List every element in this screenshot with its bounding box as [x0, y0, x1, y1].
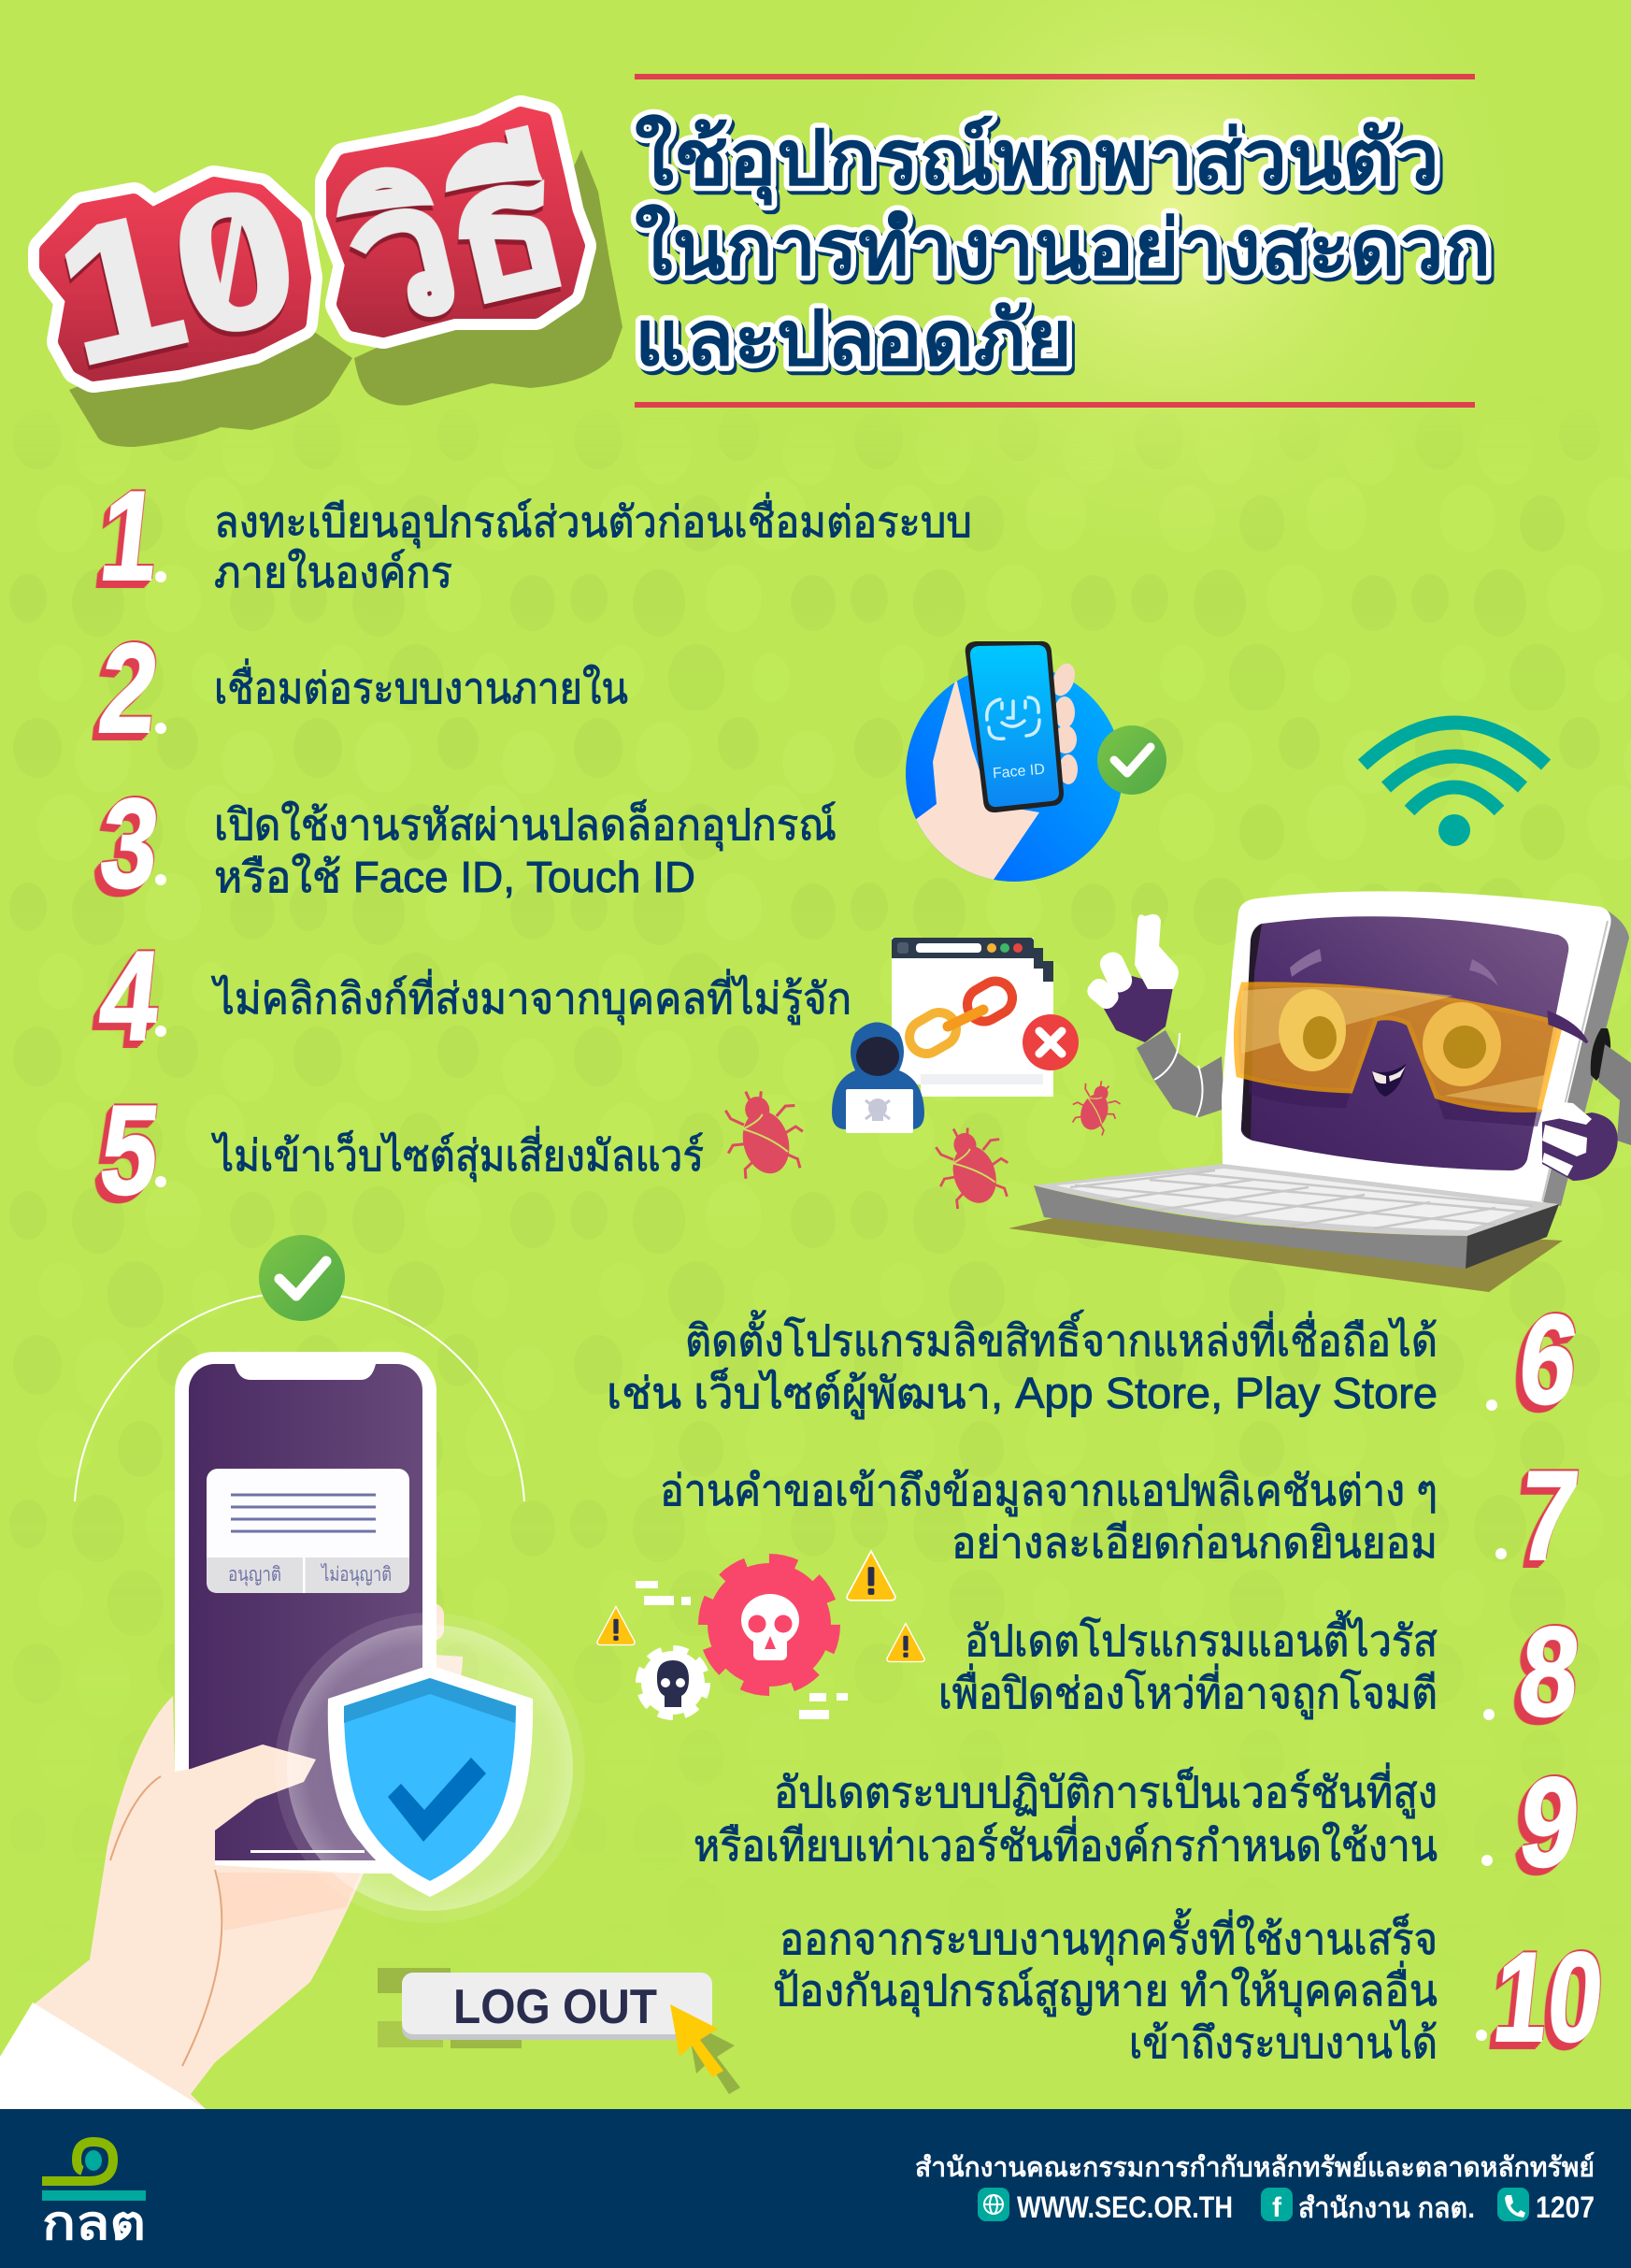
button: log out — [378, 1968, 740, 2094]
laptop gray edge — [1540, 907, 1629, 1206]
item 9: 9 — [1513, 1752, 1586, 1893]
item 8: อัปเดตโปรแกรมแอนตี้ไวรัส — [965, 1610, 1438, 1665]
illustration: phone in hand — [0, 1235, 585, 2109]
item 7: อ่านคำขอเข้าถึงข้อมูลจากแอปพลิเคชันต่าง ๆ — [660, 1466, 1438, 1516]
title line 3: และปลอดภัย — [635, 296, 1072, 381]
warning triangles — [597, 1551, 924, 1661]
website: WWW.SEC.OR.TH — [1017, 2190, 1233, 2224]
dialog: ไม่อนุญาติ — [320, 1563, 392, 1586]
item 10: 10 — [1487, 1926, 1610, 2068]
item 1: ภายในองค์กร — [214, 548, 452, 596]
mouth — [1372, 1064, 1406, 1097]
item 2: เชื่อมต่อระบบงานภายใน — [214, 658, 628, 712]
glitch strips — [378, 1968, 522, 2048]
website — [978, 2188, 1233, 2224]
footer — [0, 2109, 1631, 2268]
badge number: 10 — [39, 144, 316, 406]
item 6: เช่น เว็บไซต์ผู้พัฒนา, App Store, Play Store — [607, 1368, 1438, 1419]
facebook: สำนักงาน กลต. — [1298, 2193, 1475, 2224]
green check — [259, 1235, 345, 1321]
icon: wifi — [1363, 723, 1546, 846]
item 5 — [94, 1080, 704, 1222]
item 1 — [94, 466, 972, 608]
window title bar — [892, 938, 1034, 958]
keyboard front — [1034, 1185, 1467, 1269]
item 9 — [694, 1752, 1586, 1893]
item 1: ลงทะเบียนอุปกรณ์ส่วนตัวก่อนเชื่อมต่อระบบ — [214, 492, 972, 549]
icon: bug bottom — [924, 1116, 1018, 1215]
item 7 — [660, 1445, 1584, 1587]
white gear — [641, 1651, 705, 1715]
hinge and right arm — [1591, 1028, 1631, 1145]
item 3: หรือใช้ Face ID, Touch ID — [214, 853, 695, 901]
item 10 — [773, 1908, 1610, 2068]
logo — [42, 2142, 146, 2249]
organisation name: สำนักงานคณะกรรมการกำกับหลักทรัพย์และตลาดหลักทรัพย์ — [915, 2151, 1595, 2183]
icon: hacker — [832, 1023, 924, 1133]
keyboard side — [1466, 1204, 1559, 1269]
item 4: ไม่คลิกลิงก์ที่ส่งมาจากบุคคลที่ไม่รู้จัก — [210, 969, 851, 1026]
item 5: ไม่เข้าเว็บไซต์สุ่มเสี่ยงมัลแวร์ — [210, 1126, 704, 1183]
badge plate: วิธี — [334, 114, 578, 330]
icon: face id phone: Face ID — [992, 762, 1046, 782]
badge word: วิธี — [328, 118, 584, 365]
icon: green check — [1097, 725, 1166, 795]
laptop shadow — [1009, 1215, 1563, 1292]
item 7: อย่างละเอียดก่อนกดยินยอม — [951, 1518, 1438, 1567]
item 10: ป้องกันอุปกรณ์สูญหาย ทำให้บุคคลอื่น — [773, 1960, 1438, 2017]
arc — [75, 1292, 524, 1501]
item 6: ติดตั้งโปรแกรมลิขสิทธิ์จากแหล่งที่เชื่อถือได้ — [685, 1310, 1438, 1365]
right glove — [1542, 1101, 1618, 1181]
left glove — [1083, 914, 1179, 1042]
hotline: 1207 — [1536, 2190, 1595, 2224]
back page — [921, 961, 1053, 1097]
logo: กลต — [42, 2197, 146, 2249]
shield — [328, 1665, 533, 1897]
item 3: เปิดใช้งานรหัสผ่านปลดล็อกอุปกรณ์ — [214, 799, 837, 852]
facebook — [1261, 2188, 1475, 2224]
background — [940, 0, 1410, 481]
badge: 10 วิธี — [39, 114, 622, 447]
title line 1: ใช้อุปกรณ์พกพาส่วนตัว — [635, 114, 1439, 206]
laptop lid — [1222, 891, 1611, 1206]
illustration: broken link window — [892, 938, 1079, 1097]
item 2 — [93, 618, 628, 760]
item 10: เข้าถึงระบบงานได้ — [1129, 2018, 1438, 2067]
red gear — [708, 1563, 831, 1687]
cursor — [670, 2004, 740, 2094]
hotline — [1497, 2188, 1595, 2224]
dialog — [207, 1469, 409, 1593]
item 9: อัปเดตระบบปฏิบัติการเป็นเวอร์ชันที่สูง — [774, 1762, 1438, 1818]
goggle shade — [1249, 1075, 1542, 1127]
hand — [0, 1696, 364, 2109]
front page — [892, 938, 1034, 1074]
facebook: f — [1272, 2192, 1282, 2223]
laptop screen — [1241, 916, 1568, 1170]
keyboard deck — [1034, 1164, 1559, 1236]
icon: face id phone — [906, 641, 1166, 897]
item 10: ออกจากระบบงานทุกครั้งที่ใช้งานเสร็จ — [780, 1908, 1438, 1966]
screen reflection — [1290, 949, 1498, 986]
title — [635, 74, 1491, 408]
item 8: เพื่อปิดช่องโหว่ที่อาจถูกโจมตี — [938, 1663, 1438, 1719]
phone body — [175, 1352, 436, 1873]
item 6 — [607, 1289, 1584, 1431]
icon: red x — [1023, 1014, 1079, 1070]
dialog: อนุญาติ — [228, 1564, 281, 1586]
title line 2: ในการทำงานอย่างสะดวก — [635, 204, 1491, 291]
item 8 — [938, 1601, 1586, 1743]
middle page — [897, 948, 1043, 1084]
goggles — [1236, 984, 1587, 1110]
badge shadow — [69, 150, 622, 447]
sleeve — [0, 2002, 206, 2109]
item 1: 1 — [94, 466, 165, 608]
item 7: 7 — [1513, 1445, 1584, 1587]
badge plate: 10 — [47, 184, 304, 374]
item 3: 3 — [94, 773, 165, 915]
bubble — [275, 1613, 585, 1923]
item 2: 2 — [93, 618, 165, 760]
item 4 — [93, 926, 851, 1067]
illustration: robot laptop — [1009, 891, 1631, 1292]
icon: bug left — [714, 1080, 811, 1184]
item 4: 4 — [93, 926, 166, 1067]
back fingers — [421, 1603, 463, 1692]
left arm — [1137, 1030, 1224, 1117]
item 6: 6 — [1513, 1289, 1584, 1431]
pixel dashes — [636, 1581, 848, 1719]
button: log out: LOG OUT — [453, 1980, 657, 2034]
title rule bottom — [635, 402, 1475, 408]
item 5: 5 — [94, 1080, 165, 1222]
icon: virus gears — [597, 1551, 924, 1719]
item 3 — [94, 773, 837, 915]
icon: bug small — [1066, 1074, 1126, 1138]
chain link — [903, 975, 1019, 1060]
item 8: 8 — [1513, 1601, 1586, 1743]
item 9: หรือเทียบเท่าเวอร์ชันที่องค์กรกำหนดใช้งาน — [694, 1816, 1438, 1870]
title rule top — [635, 74, 1475, 79]
